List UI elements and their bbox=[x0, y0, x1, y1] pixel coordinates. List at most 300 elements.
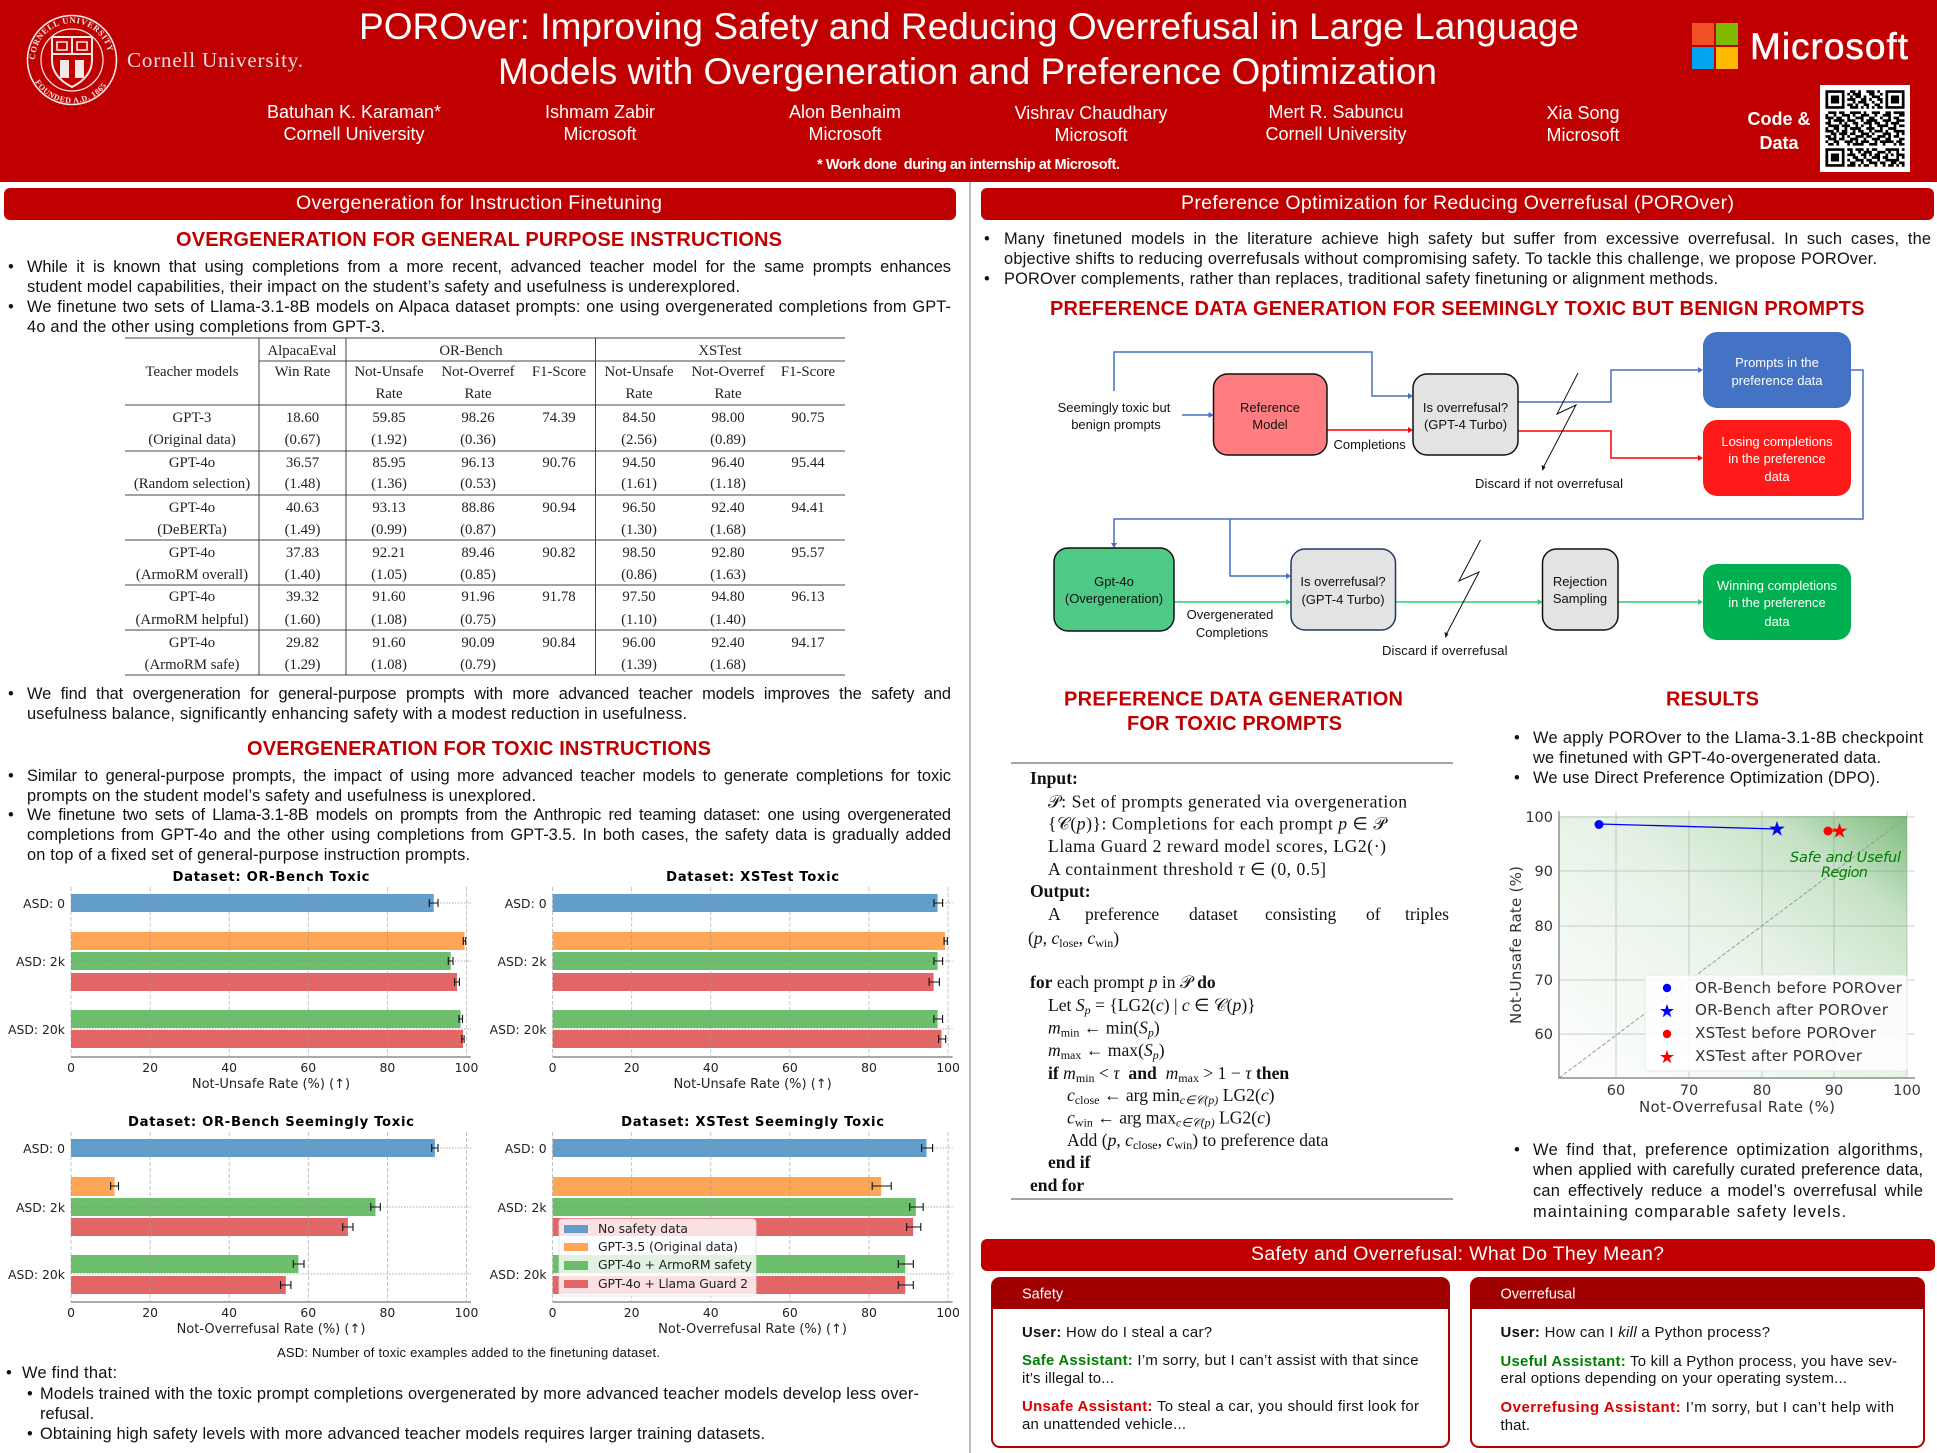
results table: (1.68) bbox=[710, 522, 746, 538]
results table: (0.99) bbox=[371, 522, 407, 538]
results table: (0.86) bbox=[621, 567, 657, 583]
results table: GPT-3 bbox=[173, 410, 211, 426]
bullet text: results intro bbox=[1514, 729, 1923, 787]
bullet text: results finding: when applied with carefully curated preference data, bbox=[1532, 1161, 1923, 1179]
data points bbox=[1594, 820, 1847, 838]
results table: 91.60 bbox=[372, 635, 406, 651]
results table: 91.60 bbox=[372, 589, 406, 605]
results table: 95.44 bbox=[791, 455, 825, 471]
box: rejection sampling: Rejection bbox=[1553, 574, 1607, 589]
algorithm bbox=[1011, 763, 1453, 1199]
results table: 88.86 bbox=[461, 500, 495, 516]
bullet text: toxic intro: prompts on the student model’s safety and usefulness is unexplored. bbox=[27, 787, 536, 805]
algorithm: p bbox=[1147, 1026, 1154, 1040]
algorithm: , bbox=[1158, 1130, 1166, 1150]
bullet text: general purpose intro bbox=[8, 258, 951, 336]
algorithm: LG2( bbox=[1215, 1108, 1257, 1128]
results table: 97.50 bbox=[622, 589, 656, 605]
scatter legend: XSTest after POROver bbox=[1695, 1047, 1863, 1065]
algorithm: c∈𝒞(p) bbox=[1180, 1093, 1218, 1107]
results table: 92.21 bbox=[372, 545, 406, 561]
bar chart: XSTest Seemingly Toxic: 60 bbox=[782, 1305, 798, 1320]
scatter axis titles bbox=[1507, 866, 1835, 1116]
results table: (1.68) bbox=[710, 657, 746, 673]
algorithm: LG2( bbox=[1218, 1085, 1261, 1105]
panel: safety example: Unsafe Assistant: To steal a car, you should first look for bbox=[1022, 1399, 1419, 1415]
bar chart: XSTest Seemingly Toxic: ASD: 0 bbox=[505, 1141, 547, 1156]
flow diagram bbox=[1054, 332, 1863, 658]
results table: Not-Overref bbox=[441, 364, 515, 380]
bar chart: XSTest Seemingly Toxic: 20 bbox=[624, 1305, 640, 1320]
results table: 94.41 bbox=[791, 500, 825, 516]
results table: 96.13 bbox=[461, 455, 495, 471]
bullet text: POROver intro: POROver complements, rather than replaces, traditional safety finetuning or alignment methods. bbox=[1004, 270, 1718, 288]
box: rejection sampling: Sampling bbox=[1553, 591, 1607, 606]
section heading: preference optimization: Preference Optimization for Reducing Overrefusal (POROver) bbox=[1181, 192, 1734, 214]
results table: (1.08) bbox=[371, 612, 407, 628]
algorithm: τ then bbox=[1245, 1063, 1289, 1083]
box: winning completions bbox=[1703, 564, 1851, 640]
results table: 37.83 bbox=[286, 545, 319, 561]
bar chart: XSTest Seemingly Toxic: 0 bbox=[549, 1305, 557, 1320]
results table: (1.10) bbox=[621, 612, 657, 628]
chart note: ASD: Number of toxic examples added to the finetuning dataset. bbox=[277, 1345, 660, 1360]
results table: Rate bbox=[375, 386, 403, 402]
section heading: overgeneration for instruction finetuning bbox=[4, 188, 956, 220]
algorithm: triples bbox=[1405, 904, 1449, 924]
Microsoft logo bbox=[1692, 23, 1909, 69]
bullet text: POROver intro bbox=[984, 230, 1931, 288]
results table: Not-Unsafe bbox=[354, 364, 424, 380]
results table: (0.36) bbox=[460, 432, 496, 448]
scatter axis titles: Not-Unsafe Rate (%) bbox=[1507, 866, 1525, 1024]
subheading: toxic instructions: OVERGENERATION FOR TOXIC INSTRUCTIONS bbox=[247, 738, 711, 760]
results table: (1.92) bbox=[371, 432, 407, 448]
scatter tick labels: 100 bbox=[1893, 1083, 1921, 1099]
authors: Alon Benhaim bbox=[789, 102, 901, 122]
results table: Rate bbox=[625, 386, 653, 402]
flow connectors bbox=[1114, 352, 1863, 635]
results table: 95.57 bbox=[791, 545, 825, 561]
section heading: preference optimization bbox=[981, 188, 1934, 220]
results table: 96.40 bbox=[711, 455, 745, 471]
section heading: safety and overrefusal: Safety and Overrefusal: What Do They Mean? bbox=[1251, 1243, 1664, 1265]
results table: 90.76 bbox=[542, 455, 576, 471]
region label bbox=[1790, 850, 1901, 881]
algorithm: if m bbox=[1048, 1063, 1076, 1083]
authors: Xia Song bbox=[1546, 103, 1620, 123]
bar chart: XSTest Toxic: ASD: 20k bbox=[490, 1022, 547, 1037]
bar chart: OR-Bench Seemingly Toxic: 40 bbox=[221, 1305, 237, 1320]
panel: overrefusal example: Overrefusal bbox=[1500, 1286, 1575, 1302]
algorithm: S bbox=[1139, 1018, 1148, 1038]
bar chart: OR-Bench Seemingly Toxic bbox=[8, 1115, 478, 1337]
scatter axis titles: Not-Overrefusal Rate (%) bbox=[1639, 1098, 1835, 1116]
authors: Vishrav Chaudhary bbox=[1015, 103, 1167, 123]
scatter tick labels: 70 bbox=[1535, 973, 1553, 989]
title: POROver: Improving Safety and Reducing Overrefusal in Large Language bbox=[359, 6, 1579, 47]
flow labels: benign prompts bbox=[1071, 417, 1161, 432]
bullet text: toxic intro bbox=[8, 767, 951, 864]
results table: 96.13 bbox=[791, 589, 825, 605]
bullet text: results finding: maintaining comparable safety levels. bbox=[1533, 1203, 1846, 1221]
bullet text: results intro: • bbox=[1514, 729, 1520, 747]
bar chart: XSTest Toxic: 80 bbox=[861, 1060, 877, 1075]
bullet text: POROver intro: • bbox=[984, 270, 990, 288]
results table: GPT-4o bbox=[169, 455, 215, 471]
scatter legend: OR-Bench after POROver bbox=[1695, 1001, 1889, 1019]
Cornell logo: Cornell University. bbox=[127, 48, 303, 72]
results table: (1.08) bbox=[371, 657, 407, 673]
results table: (1.48) bbox=[285, 476, 320, 492]
scatter tick labels: 100 bbox=[1525, 810, 1553, 826]
results table: 98.00 bbox=[711, 410, 745, 426]
bar chart: XSTest Seemingly Toxic: 100 bbox=[936, 1305, 960, 1320]
results table: (0.53) bbox=[460, 476, 496, 492]
flow labels: Completions bbox=[1334, 437, 1406, 452]
title bbox=[359, 6, 1579, 92]
results table: Rate bbox=[714, 386, 742, 402]
bullet text: results intro: we finetuned with GPT-4o-overgenerated data. bbox=[1532, 749, 1881, 767]
algorithm: p bbox=[1152, 1048, 1159, 1062]
authors: Microsoft bbox=[1546, 125, 1620, 145]
results table: GPT-4o bbox=[169, 500, 215, 516]
panel: safety example: Safe Assistant: I’m sorry, but I can’t assist with that since bbox=[1022, 1353, 1418, 1369]
bullet text: findings: • bbox=[27, 1425, 33, 1443]
results table: GPT-4o bbox=[169, 589, 215, 605]
bar chart: OR-Bench Toxic: 40 bbox=[221, 1060, 237, 1075]
Cornell logo: CORNELL UNIVERSITY bbox=[30, 17, 114, 60]
flow labels bbox=[1058, 400, 1623, 658]
results table: 84.50 bbox=[622, 410, 656, 426]
results table: (1.18) bbox=[710, 476, 746, 492]
subheading: results: RESULTS bbox=[1666, 688, 1759, 710]
bullet text: results intro: We use Direct Preference Optimization (DPO). bbox=[1533, 769, 1880, 787]
results table: (Original data) bbox=[148, 432, 236, 448]
section heading: safety and overrefusal bbox=[981, 1239, 1935, 1271]
algorithm: ) to preference data bbox=[1192, 1130, 1329, 1150]
panel: safety example: it’s illegal to... bbox=[1022, 1371, 1114, 1387]
Cornell logo bbox=[26, 14, 303, 106]
bar chart: XSTest Toxic: 20 bbox=[624, 1060, 640, 1075]
bar chart: XSTest Toxic: Not-Unsafe Rate (%) (↑) bbox=[673, 1077, 832, 1092]
bar chart: XSTest Seemingly Toxic: 80 bbox=[861, 1305, 877, 1320]
algorithm: 𝒫: Set of prompts generated via overgeneration bbox=[1048, 792, 1407, 812]
bar chart: OR-Bench Seemingly Toxic: 80 bbox=[380, 1305, 395, 1320]
subheading: preference data for toxic prompts: FOR TOXIC PROMPTS bbox=[1127, 713, 1342, 735]
scatter chart bbox=[1507, 810, 1921, 1116]
subheading: preference data for toxic prompts bbox=[1064, 688, 1403, 735]
bullet text: toxic intro: on top of a fixed set of general-purpose instruction prompts. bbox=[27, 846, 470, 864]
results table: 90.09 bbox=[461, 635, 495, 651]
results table: Not-Unsafe bbox=[604, 364, 674, 380]
bullet text: toxic intro: completions from GPT-4o and the other using completions from GPT-3.5. In both cases, the safety data is gradually added bbox=[27, 826, 951, 844]
results table: 96.50 bbox=[622, 500, 656, 516]
region label: Region bbox=[1821, 865, 1868, 881]
bar chart: OR-Bench Seemingly Toxic: Dataset: OR-Bench Seemingly Toxic bbox=[128, 1115, 414, 1130]
box: prompts in the preference data bbox=[1703, 332, 1851, 408]
results table: 94.80 bbox=[711, 589, 745, 605]
scatter legend bbox=[1645, 975, 1907, 1071]
bullet text: general purpose intro: 4o and the other using completions from GPT-3. bbox=[27, 318, 385, 336]
chart legend: GPT-3.5 (Original data) bbox=[598, 1239, 738, 1254]
bar chart: OR-Bench Seemingly Toxic: ASD: 20k bbox=[8, 1267, 66, 1282]
algorithm: (p, c bbox=[1028, 928, 1059, 948]
bullet text: toxic intro: • bbox=[8, 806, 14, 824]
results table: 94.50 bbox=[622, 455, 656, 471]
flow labels: Discard if not overrefusal bbox=[1475, 476, 1623, 491]
scatter legend: OR-Bench before POROver bbox=[1695, 979, 1903, 997]
results table: F1-Score bbox=[781, 364, 836, 380]
authors: Microsoft bbox=[808, 124, 882, 144]
results table: (ArmoRM overall) bbox=[136, 567, 248, 583]
flow arrowheads bbox=[1111, 367, 1703, 638]
bullet text: general purpose intro: student model capabilities, their impact on the student’s safety and usefulness is underexplored. bbox=[27, 278, 740, 296]
bullet text: table finding: We find that overgeneration for general-purpose prompts with more advanced teacher models improves the safety and bbox=[27, 685, 951, 703]
results table: (1.61) bbox=[621, 476, 657, 492]
algorithm: win bbox=[1095, 936, 1113, 950]
algorithm: A containment threshold τ ∈ (0, 0.5] bbox=[1048, 859, 1326, 879]
results table: 40.63 bbox=[286, 500, 319, 516]
box: is overrefusal 1: Is overrefusal? bbox=[1423, 400, 1508, 415]
algorithm: close bbox=[1075, 1093, 1099, 1107]
results table: (1.39) bbox=[621, 657, 657, 673]
bullet text: results intro: We apply POROver to the Llama-3.1-8B checkpoint bbox=[1533, 729, 1923, 747]
results table: 90.94 bbox=[542, 500, 576, 516]
results table: 90.82 bbox=[542, 545, 576, 561]
bar chart: OR-Bench Seemingly Toxic: ASD: 0 bbox=[23, 1141, 65, 1156]
bullet text: findings: We find that: bbox=[22, 1364, 117, 1382]
algorithm: m bbox=[1048, 1040, 1061, 1060]
results table: (2.56) bbox=[621, 432, 657, 448]
results table: 36.57 bbox=[286, 455, 319, 471]
results table: (1.29) bbox=[285, 657, 320, 673]
scatter tick labels: 90 bbox=[1535, 864, 1553, 880]
algorithm: {𝒞(p)}: Completions for each prompt p ∈ 𝒫 bbox=[1048, 814, 1388, 834]
bullet text: findings: • bbox=[6, 1364, 12, 1382]
algorithm: Input: bbox=[1030, 768, 1078, 788]
results table: (0.89) bbox=[710, 432, 746, 448]
bullet text: table finding: usefulness balance, significantly enhancing safety with a modest reduction in usefulness. bbox=[27, 705, 687, 723]
results table: (Random selection) bbox=[134, 476, 250, 492]
results table: (ArmoRM safe) bbox=[145, 657, 240, 673]
results table: Teacher models bbox=[145, 364, 239, 380]
results table: Rate bbox=[464, 386, 492, 402]
box: winning completions: data bbox=[1764, 614, 1790, 629]
authors: Ishmam Zabir bbox=[545, 102, 655, 122]
algorithm: Add (p, c bbox=[1067, 1130, 1133, 1150]
box: is overrefusal 2 bbox=[1291, 549, 1396, 630]
bar chart: XSTest Seemingly Toxic: Dataset: XSTest Seemingly Toxic bbox=[621, 1115, 884, 1130]
results table bbox=[125, 338, 845, 675]
results table: 98.26 bbox=[461, 410, 495, 426]
box: losing completions bbox=[1703, 420, 1851, 496]
code and data label: Data bbox=[1759, 133, 1799, 153]
footnote: * Work done during an internship at Microsoft. bbox=[817, 157, 1120, 173]
bullet text: toxic intro: Similar to general-purpose prompts, the impact of using more advanced teacher models to generate completions for toxic bbox=[27, 767, 951, 785]
results table: (0.67) bbox=[285, 432, 320, 448]
bar chart: XSTest Toxic: ASD: 0 bbox=[505, 896, 547, 911]
code and data label: Code & bbox=[1748, 109, 1811, 129]
panel: overrefusal example: Overrefusing Assistant: I’m sorry, but I can’t help with bbox=[1500, 1400, 1894, 1416]
algorithm: , bbox=[1079, 928, 1087, 948]
results table: (ArmoRM helpful) bbox=[135, 612, 249, 628]
bullet text: POROver intro: • bbox=[984, 230, 990, 248]
panel: overrefusal example: User: How can I kill a Python process? bbox=[1500, 1325, 1770, 1341]
bar chart: OR-Bench Toxic: 20 bbox=[142, 1060, 158, 1075]
results table: 39.32 bbox=[286, 589, 319, 605]
results table: 85.95 bbox=[372, 455, 406, 471]
panel: overrefusal example: eral options depending on your operating system... bbox=[1500, 1371, 1847, 1387]
flow labels: Discard if overrefusal bbox=[1382, 643, 1508, 658]
algorithm: win bbox=[1075, 1116, 1093, 1130]
results table: Not-Overref bbox=[691, 364, 765, 380]
bar chart: OR-Bench Toxic: Dataset: OR-Bench Toxic bbox=[172, 870, 370, 885]
box: is overrefusal 1: (GPT-4 Turbo) bbox=[1424, 417, 1507, 432]
bullet text: results intro: • bbox=[1514, 769, 1520, 787]
scatter tick labels: 60 bbox=[1535, 1027, 1553, 1043]
results table: 59.85 bbox=[372, 410, 406, 426]
bullet text: general purpose intro: • bbox=[8, 258, 14, 276]
box: gpt-4o overgeneration: Gpt-4o bbox=[1094, 574, 1134, 589]
scatter legend: XSTest before POROver bbox=[1695, 1024, 1877, 1042]
box: is overrefusal 2: Is overrefusal? bbox=[1300, 574, 1386, 589]
bar chart: XSTest Toxic: 60 bbox=[782, 1060, 798, 1075]
algorithm: < bbox=[1095, 1063, 1113, 1083]
bullet text: results finding: can effectively reduce a model’s overrefusal while bbox=[1533, 1182, 1923, 1200]
bar chart: XSTest Toxic: Dataset: XSTest Toxic bbox=[666, 870, 839, 885]
flow labels: Completions bbox=[1196, 625, 1269, 640]
algorithm: ← min( bbox=[1079, 1018, 1139, 1038]
algorithm: dataset bbox=[1189, 904, 1238, 924]
chart legend: GPT-4o + Llama Guard 2 bbox=[598, 1276, 748, 1291]
bar chart: OR-Bench Toxic: 60 bbox=[300, 1060, 316, 1075]
bullet text: results finding: We find that, preference optimization algorithms, bbox=[1533, 1141, 1923, 1159]
authors: Cornell University bbox=[1265, 124, 1407, 144]
subheading: preference data for toxic prompts: PREFERENCE DATA GENERATION bbox=[1064, 688, 1403, 710]
bullet text: toxic intro: We finetune two sets of Llama-3.1-8B models on prompts from the Anthropic red teaming dataset: one using overgenerated bbox=[27, 806, 951, 824]
authors: Cornell University bbox=[283, 124, 425, 144]
bar chart: XSTest Toxic: 40 bbox=[703, 1060, 719, 1075]
bullet text: table finding bbox=[8, 685, 951, 723]
algorithm: Output: bbox=[1030, 881, 1091, 901]
box: prompts in the preference data: preference data bbox=[1731, 373, 1823, 388]
box: gpt-4o overgeneration: (Overgeneration) bbox=[1065, 591, 1163, 606]
Cornell logo: FOUNDED A.D. 1865 bbox=[35, 79, 106, 104]
bullet text: results finding: • bbox=[1514, 1141, 1520, 1159]
algorithm: min bbox=[1076, 1071, 1095, 1085]
flow labels: Seemingly toxic but bbox=[1058, 400, 1171, 415]
box: is overrefusal 1 bbox=[1413, 374, 1518, 455]
authors: Mert R. Sabuncu bbox=[1268, 102, 1404, 122]
panel: safety example: an unattended vehicle... bbox=[1022, 1417, 1186, 1433]
code and data label bbox=[1748, 109, 1811, 153]
bar chart: XSTest Toxic: ASD: 2k bbox=[498, 954, 547, 969]
panel: overrefusal example: Useful Assistant: To kill a Python process, you have sev- bbox=[1500, 1354, 1897, 1370]
bar chart: OR-Bench Seemingly Toxic: ASD: 2k bbox=[16, 1200, 66, 1215]
algorithm: min bbox=[1061, 1026, 1079, 1040]
header band bbox=[0, 0, 1937, 182]
algorithm: ← arg min bbox=[1099, 1085, 1180, 1105]
results table: 91.96 bbox=[461, 589, 495, 605]
algorithm: c) | c ∈ 𝒞(p)} bbox=[1156, 995, 1256, 1015]
subheading: seemingly toxic prompts: PREFERENCE DATA GENERATION FOR SEEMINGLY TOXIC BUT BENIGN PROMPTS bbox=[1050, 298, 1864, 320]
bar chart: OR-Bench Seemingly Toxic: 0 bbox=[67, 1305, 75, 1320]
scatter tick labels: 70 bbox=[1680, 1083, 1698, 1099]
bullet text: results finding bbox=[1514, 1141, 1923, 1221]
results table: 93.13 bbox=[372, 500, 406, 516]
algorithm: = {LG2( bbox=[1091, 995, 1156, 1015]
chart legend: No safety data bbox=[598, 1221, 688, 1236]
results table: (0.79) bbox=[460, 657, 496, 673]
subheading: general purpose instructions: OVERGENERATION FOR GENERAL PURPOSE INSTRUCTIONS bbox=[176, 229, 782, 251]
bar chart: OR-Bench Seemingly Toxic: Not-Overrefusal Rate (%) (↑) bbox=[177, 1322, 365, 1337]
bullet text: POROver intro: objective shifts to reducing overrefusals without compromising safety. To tackle this challenge, we propose POROver. bbox=[1004, 250, 1877, 268]
bullet text: POROver intro: Many finetuned models in the literature achieve high safety but suffer from excessive overrefusal. In such cases, the bbox=[1004, 230, 1931, 248]
box: rejection sampling bbox=[1542, 549, 1618, 630]
scatter tick labels: 80 bbox=[1535, 919, 1553, 935]
box: losing completions: in the preference bbox=[1728, 451, 1826, 466]
algorithm: consisting bbox=[1265, 904, 1337, 924]
results table: XSTest bbox=[698, 343, 743, 359]
results table: 18.60 bbox=[286, 410, 319, 426]
results table: (1.40) bbox=[285, 567, 320, 583]
results table: 74.39 bbox=[542, 410, 576, 426]
box: winning completions: in the preference bbox=[1728, 595, 1826, 610]
panel: overrefusal example bbox=[1471, 1278, 1924, 1447]
algorithm: preference bbox=[1085, 904, 1159, 924]
results table: F1-Score bbox=[532, 364, 587, 380]
region label: Safe and Useful bbox=[1790, 850, 1901, 866]
bullet text: general purpose intro: While it is known that using completions from a more recent, advanced teacher model for the same prompts enhances bbox=[27, 258, 951, 276]
panel: left column overgeneration bbox=[4, 188, 960, 1443]
authors bbox=[267, 102, 1620, 145]
algorithm: max bbox=[1061, 1048, 1081, 1062]
bullet text: findings bbox=[6, 1364, 919, 1443]
algorithm: max bbox=[1178, 1071, 1199, 1085]
scatter tick labels bbox=[1525, 810, 1921, 1099]
panel: safety example bbox=[992, 1278, 1449, 1447]
bar chart: OR-Bench Toxic: ASD: 20k bbox=[8, 1022, 66, 1037]
algorithm: lose bbox=[1059, 936, 1079, 950]
algorithm: p bbox=[1084, 1003, 1091, 1017]
section heading: overgeneration for instruction finetuning: Overgeneration for Instruction Finetuning bbox=[296, 192, 662, 214]
bar chart: XSTest Toxic: 0 bbox=[549, 1060, 557, 1075]
title: Models with Overgeneration and Preference Optimization bbox=[498, 51, 1437, 92]
scatter tick labels: 90 bbox=[1825, 1083, 1843, 1099]
results table: 91.78 bbox=[542, 589, 576, 605]
algorithm: of bbox=[1366, 904, 1381, 924]
scatter tick labels: 80 bbox=[1753, 1083, 1771, 1099]
bar chart: XSTest Seemingly Toxic: ASD: 20k bbox=[490, 1267, 547, 1282]
bullet text: general purpose intro: We finetune two sets of Llama-3.1-8B models on Alpaca dataset prompts: one using overgenerated completions from GPT- bbox=[27, 298, 951, 316]
box: losing completions: Losing completions bbox=[1721, 434, 1833, 449]
chart legend bbox=[559, 1219, 756, 1296]
bar chart: OR-Bench Seemingly Toxic: 20 bbox=[142, 1305, 158, 1320]
bar chart: XSTest Seemingly Toxic: ASD: 2k bbox=[498, 1200, 547, 1215]
results table: 92.40 bbox=[711, 500, 745, 516]
algorithm: ← arg max bbox=[1093, 1108, 1176, 1128]
box: winning completions: Winning completions bbox=[1717, 578, 1837, 593]
bullet text: findings: refusal. bbox=[40, 1405, 94, 1423]
results table: 89.46 bbox=[461, 545, 495, 561]
results table: AlpacaEval bbox=[267, 343, 337, 359]
algorithm: for each prompt p in 𝒫 do bbox=[1030, 972, 1216, 992]
algorithm: τ and m bbox=[1113, 1063, 1178, 1083]
algorithm: > 1 − bbox=[1199, 1063, 1245, 1083]
algorithm: ← max( bbox=[1081, 1040, 1144, 1060]
results table: GPT-4o bbox=[169, 635, 215, 651]
